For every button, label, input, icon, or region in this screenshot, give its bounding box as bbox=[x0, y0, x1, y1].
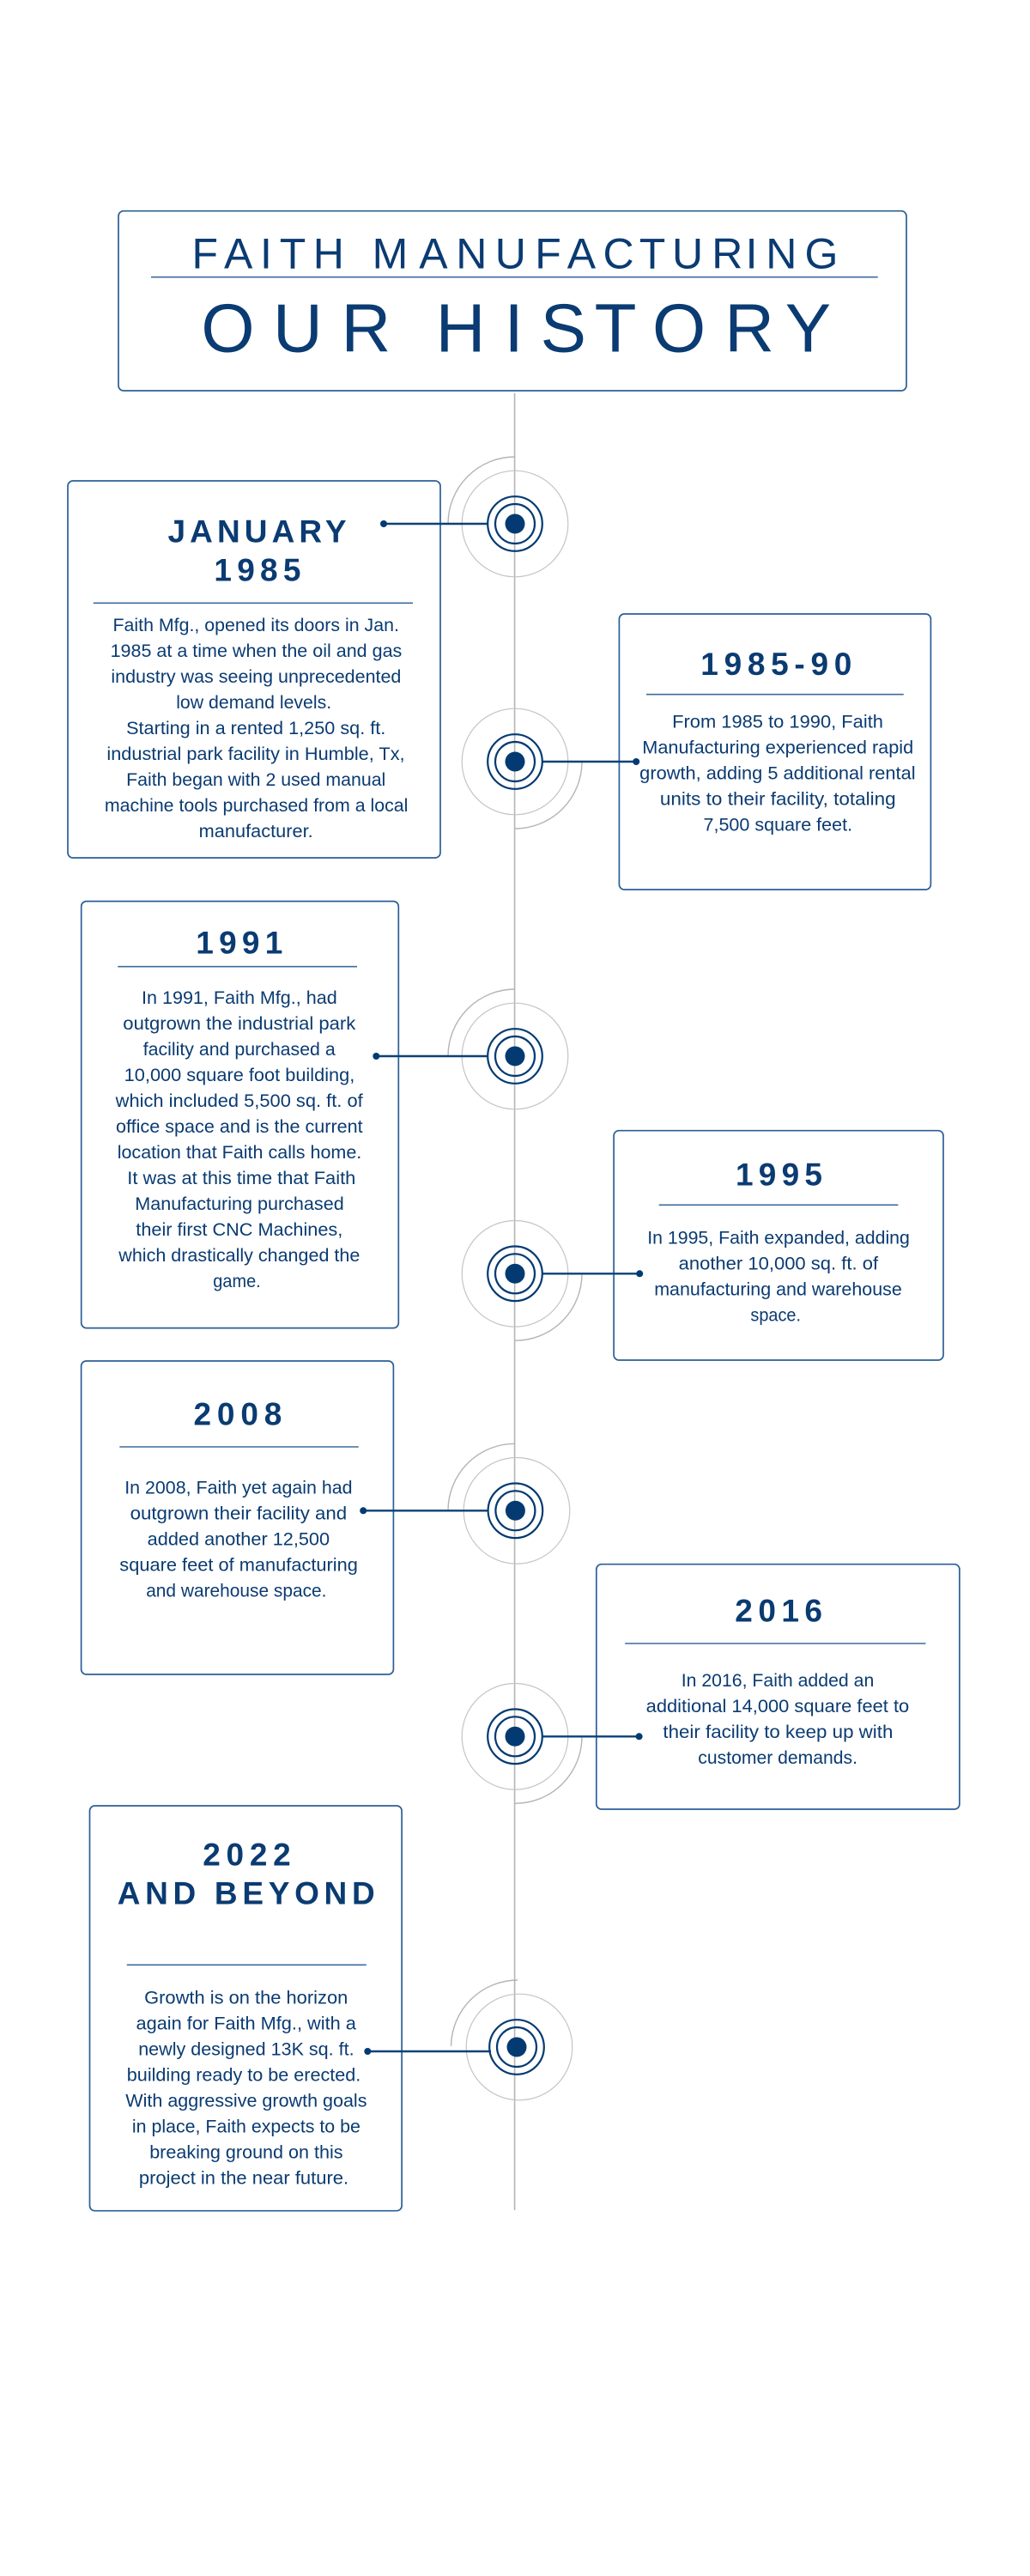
panel: 1985-90 bbox=[619, 614, 930, 890]
text block: 1991: office space and is the current bbox=[116, 1115, 363, 1137]
text block: 2008: In 2008, Faith yet again had bbox=[124, 1476, 353, 1498]
text block: 2022 and beyond: in place, Faith expects to be bbox=[132, 2115, 360, 2136]
text block: 2022 and beyond: project in the near future. bbox=[139, 2166, 348, 2188]
text block: 1995: another 10,000 sq. ft. of bbox=[679, 1252, 879, 1273]
text block: 1991 bbox=[115, 987, 364, 1291]
text block: 2022 and beyond: breaking ground on this bbox=[149, 2141, 343, 2162]
text block: 1991: outgrown the industrial park bbox=[123, 1012, 355, 1034]
text block: 1991: which drastically changed the bbox=[118, 1244, 360, 1266]
panel: 2016 bbox=[597, 1564, 960, 1809]
text block: 1991: It was at this time that Faith bbox=[127, 1167, 355, 1188]
title: Our History: OUR HISTORY bbox=[201, 289, 831, 366]
text block: 2022 and beyond: building ready to be erected. bbox=[127, 2063, 360, 2085]
text block: 1985-90: units to their facility, totaling bbox=[660, 787, 896, 809]
text block: January 1985 bbox=[105, 614, 408, 841]
text block: 2016: In 2016, Faith added an bbox=[682, 1669, 874, 1691]
text block: 2008: and warehouse space. bbox=[146, 1579, 326, 1601]
text block: 2016: customer demands. bbox=[698, 1747, 857, 1768]
text block: 1991: Manufacturing purchased bbox=[135, 1193, 344, 1214]
text block: January 1985: 1985 at a time when the oil and gas bbox=[111, 640, 402, 661]
text block: 2022 and beyond bbox=[125, 1986, 367, 2188]
text block: January 1985: Faith began with 2 used manual bbox=[126, 769, 385, 790]
text block: 1991: facility and purchased a bbox=[143, 1038, 336, 1060]
text block: January 1985: industry was seeing unprecedented bbox=[111, 665, 401, 687]
text block: 1995: manufacturing and warehouse bbox=[654, 1278, 902, 1299]
panel: 1991 bbox=[82, 902, 398, 1328]
text block: 2008: square feet of manufacturing bbox=[119, 1553, 358, 1575]
heading: 2016: 2016 bbox=[735, 1593, 822, 1628]
text block: 1985-90 bbox=[639, 710, 916, 835]
heading: 1991: 1991 bbox=[196, 926, 282, 961]
panel: 2008 bbox=[82, 1361, 393, 1674]
heading: 2008: 2008 bbox=[194, 1396, 282, 1431]
title panel bbox=[118, 211, 906, 391]
panel: 1995 bbox=[614, 1131, 943, 1360]
node: 1985-90 bbox=[462, 708, 639, 829]
text block: 2022 and beyond: Growth is on the horizon bbox=[144, 1986, 348, 2008]
heading: January 1985: 1985 bbox=[214, 553, 300, 588]
panel: January 1985 bbox=[68, 481, 440, 858]
text block: 2008: outgrown their facility and bbox=[130, 1502, 347, 1523]
timeline spine bbox=[514, 393, 516, 2210]
text block: 2022 and beyond: With aggressive growth goals bbox=[125, 2089, 367, 2111]
text block: 1991: location that Faith calls home. bbox=[118, 1141, 361, 1163]
text block: 1991: In 1991, Faith Mfg., had bbox=[142, 987, 337, 1008]
text block: 1991: game. bbox=[213, 1270, 261, 1291]
title: Faith Manufacturing: FAITH MANUFACTURING bbox=[192, 229, 838, 277]
text block: 1985-90: Manufacturing experienced rapid bbox=[642, 736, 913, 757]
text block: 1991: their first CNC Machines, bbox=[136, 1218, 342, 1240]
text block: January 1985: Starting in a rented 1,250 sq. ft. bbox=[126, 717, 385, 738]
text block: 2022 and beyond: newly designed 13K sq. ft. bbox=[138, 2038, 354, 2059]
text block: January 1985: Faith Mfg., opened its doors in Jan. bbox=[113, 614, 399, 635]
text block: January 1985: machine tools purchased from a local bbox=[105, 794, 408, 816]
text block: 2008 bbox=[119, 1476, 358, 1601]
text block: 1995: space. bbox=[750, 1303, 801, 1325]
panel: 2022 and beyond bbox=[89, 1806, 402, 2211]
heading: 2022 and beyond: AND BEYOND bbox=[118, 1875, 375, 1911]
text block: 1985-90: growth, adding 5 additional rental bbox=[639, 762, 916, 783]
heading: January 1985: JANUARY bbox=[168, 514, 347, 550]
node: 2008 bbox=[360, 1443, 570, 1564]
node: 1995 bbox=[462, 1221, 643, 1340]
text block: 1991: 10,000 square foot building, bbox=[124, 1064, 354, 1085]
text block: January 1985: industrial park facility in Humble, Tx, bbox=[106, 743, 405, 764]
heading: January 1985 bbox=[168, 514, 347, 588]
text block: 1985-90: From 1985 to 1990, Faith bbox=[672, 710, 883, 732]
text block: 1985-90: 7,500 square feet. bbox=[704, 813, 852, 835]
heading: 1995: 1995 bbox=[736, 1157, 822, 1193]
text block: 2008: added another 12,500 bbox=[148, 1528, 330, 1549]
text block: 1995 bbox=[647, 1226, 910, 1325]
heading: 1985-90: 1985-90 bbox=[700, 647, 851, 682]
text block: 2022 and beyond: again for Faith Mfg., with a bbox=[136, 2012, 357, 2033]
node: 2016 bbox=[462, 1683, 643, 1803]
text block: January 1985: low demand levels. bbox=[176, 691, 331, 713]
text block: 2016: additional 14,000 square feet to bbox=[646, 1695, 909, 1716]
node: January 1985 bbox=[380, 457, 568, 577]
text block: 1995: In 1995, Faith expanded, adding bbox=[647, 1226, 910, 1248]
node: 2022 and beyond bbox=[364, 1980, 573, 2100]
text block: 1991: which included 5,500 sq. ft. of bbox=[115, 1090, 364, 1111]
text block: 2016 bbox=[646, 1669, 909, 1768]
heading: 2022 and beyond bbox=[118, 1838, 375, 1911]
heading: 2022 and beyond: 2022 bbox=[203, 1838, 291, 1873]
text block: January 1985: manufacturer. bbox=[199, 820, 313, 841]
text block: 2016: their facility to keep up with bbox=[663, 1721, 893, 1742]
node: 1991 bbox=[373, 989, 568, 1109]
